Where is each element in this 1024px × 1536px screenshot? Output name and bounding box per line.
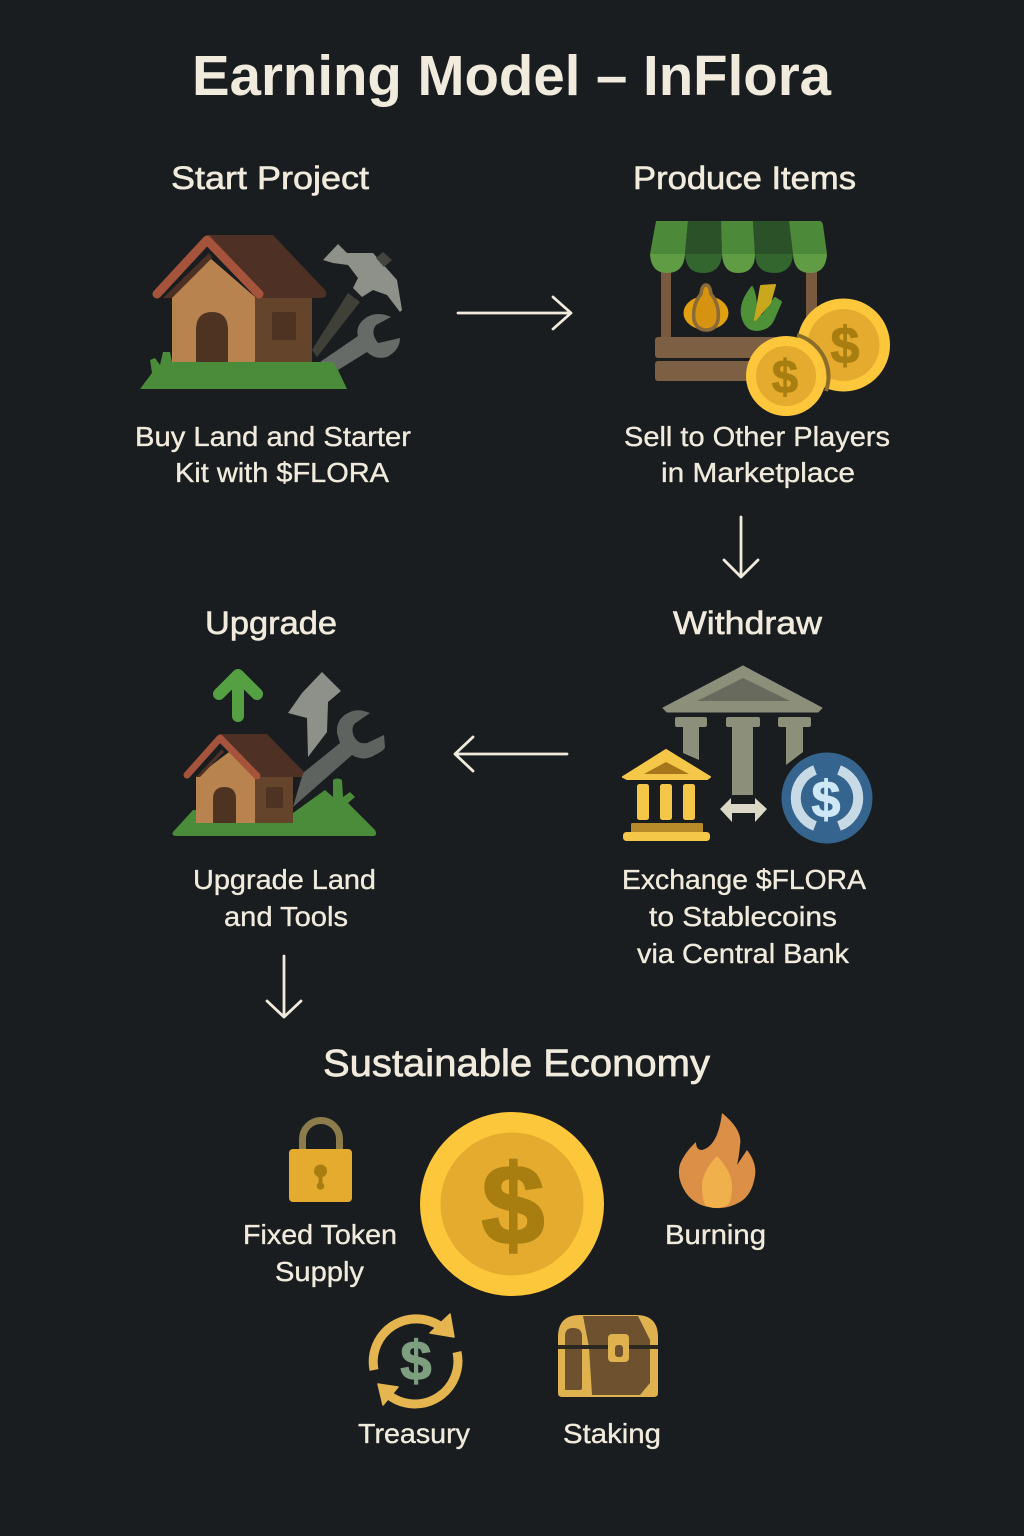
caption: withdraw	[622, 864, 866, 969]
icon: house with tools	[140, 235, 402, 389]
arrow: produce to withdraw	[724, 517, 758, 577]
caption: start project	[135, 421, 411, 488]
icon: central bank and stablecoin: $	[812, 771, 841, 829]
label: fixed token supply	[243, 1219, 397, 1287]
icon: padlock	[289, 1120, 352, 1202]
arrow: upgrade to economy	[267, 956, 301, 1017]
icon: market stall with coins: $	[772, 350, 798, 403]
panel: start project	[135, 160, 411, 488]
arrow: withdraw to upgrade	[455, 737, 567, 771]
icon: central coin: $	[482, 1142, 544, 1268]
caption: upgrade: and Tools	[224, 901, 348, 932]
heading: produce items: Produce Items	[633, 160, 856, 196]
heading: withdraw: Withdraw	[673, 605, 823, 641]
icon: market stall with coins: $	[831, 317, 860, 375]
caption: start project: Kit with $FLORA	[175, 457, 389, 488]
label: staking: Staking	[563, 1418, 661, 1449]
label: treasury: Treasury	[358, 1418, 470, 1449]
title: Earning Model – InFlora	[192, 44, 832, 108]
caption: withdraw: via Central Bank	[637, 938, 850, 969]
icon: upgraded house	[172, 672, 385, 836]
caption: upgrade	[193, 864, 376, 932]
label: fixed token supply: Supply	[275, 1256, 364, 1287]
panel: upgrade	[172, 605, 385, 932]
icon: central bank and stablecoin	[623, 666, 872, 844]
caption: withdraw: to Stablecoins	[649, 901, 837, 932]
icon: circular arrows with dollar: $	[400, 1329, 432, 1392]
item: treasury	[358, 1314, 470, 1449]
icon: flame	[679, 1113, 755, 1208]
item: fixed token supply	[243, 1120, 397, 1287]
caption: upgrade: Upgrade Land	[193, 864, 376, 895]
caption: produce items	[624, 421, 890, 488]
item: burning	[665, 1113, 766, 1250]
icon: market stall with coins	[650, 221, 890, 416]
panel: sustainable economy	[243, 1043, 766, 1449]
arrow: start to produce	[458, 297, 571, 329]
panel: produce items	[624, 160, 890, 488]
item: staking	[558, 1315, 661, 1449]
caption: withdraw: Exchange $FLORA	[622, 864, 866, 895]
caption: produce items: Sell to Other Players	[624, 421, 890, 452]
heading: sustainable economy: Sustainable Economy	[323, 1043, 710, 1085]
heading: upgrade: Upgrade	[205, 605, 337, 641]
icon: central coin	[420, 1112, 604, 1296]
caption: start project: Buy Land and Starter	[135, 421, 411, 452]
icon: treasure chest	[558, 1315, 658, 1397]
panel: withdraw	[622, 605, 872, 969]
caption: produce items: in Marketplace	[661, 457, 855, 488]
heading: start project: Start Project	[171, 160, 369, 196]
label: burning: Burning	[665, 1219, 766, 1250]
label: fixed token supply: Fixed Token	[243, 1219, 397, 1250]
